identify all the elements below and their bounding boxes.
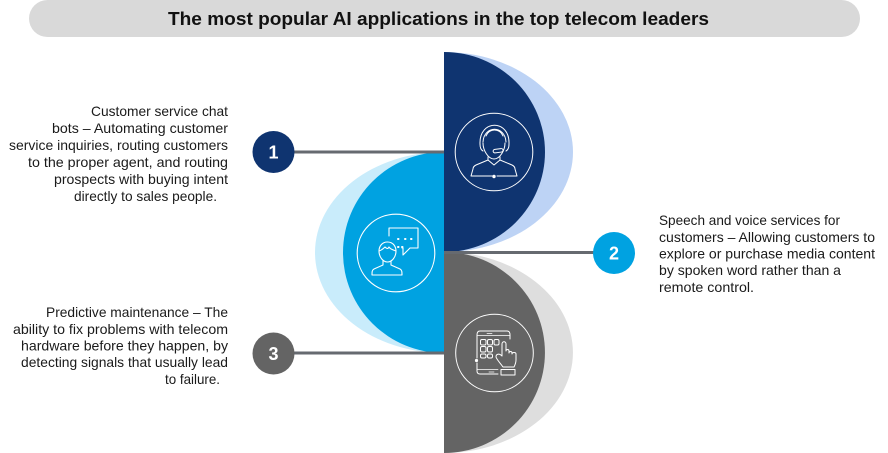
text block 2: by spoken word rather than a xyxy=(659,263,841,278)
badge 2: 2 xyxy=(609,244,619,264)
icon: tablet with touch hand xyxy=(456,314,533,392)
text block 3: ability to fix problems with telecom xyxy=(13,322,228,337)
text block 2: customers – Allowing customers to xyxy=(659,230,875,245)
text block 1: prospects with buying intent xyxy=(54,172,228,187)
shape: dark gray half circle xyxy=(444,252,545,453)
badge 3 xyxy=(252,332,294,374)
connector 3 xyxy=(290,352,444,354)
text block 3: detecting signals that usually lead xyxy=(21,355,228,370)
text block 2: Speech and voice services for xyxy=(659,213,840,228)
badge 3: 3 xyxy=(268,344,279,364)
text block 3: hardware before they happen, by xyxy=(21,338,228,354)
text block 2: remote control. xyxy=(659,280,754,295)
text block 2: explore or purchase media content xyxy=(659,246,875,262)
text block 1: service inquiries, routing customers xyxy=(9,138,228,153)
connector 2 xyxy=(444,251,600,254)
text block 1: bots – Automating customer xyxy=(52,121,228,136)
text block 2 xyxy=(659,213,875,295)
icon: person with speech bubble xyxy=(357,214,435,292)
shape: navy half circle xyxy=(444,52,545,252)
text block 1: directly to sales people. xyxy=(74,189,217,204)
text block 1 xyxy=(9,104,228,204)
icon: headset agent xyxy=(455,113,533,191)
text block 3 xyxy=(13,305,228,387)
text block 3: Predictive maintenance – The xyxy=(46,305,228,320)
shape: pale cyan crescent xyxy=(315,152,444,353)
shape: light gray crescent xyxy=(444,252,573,453)
shape: cyan half circle xyxy=(343,152,444,353)
text block 1: Customer service chat xyxy=(91,104,228,119)
title xyxy=(29,0,860,37)
text block 3: to failure. xyxy=(165,372,220,387)
badge 1: 1 xyxy=(268,142,279,162)
connector 1 xyxy=(290,150,444,154)
text block 1: to the proper agent, and routing xyxy=(28,155,228,170)
badge 1 xyxy=(252,131,294,173)
badge 2 xyxy=(593,232,635,274)
title: The most popular AI applications in the top telecom leaders xyxy=(168,8,709,29)
shape: light blue crescent xyxy=(444,52,573,252)
